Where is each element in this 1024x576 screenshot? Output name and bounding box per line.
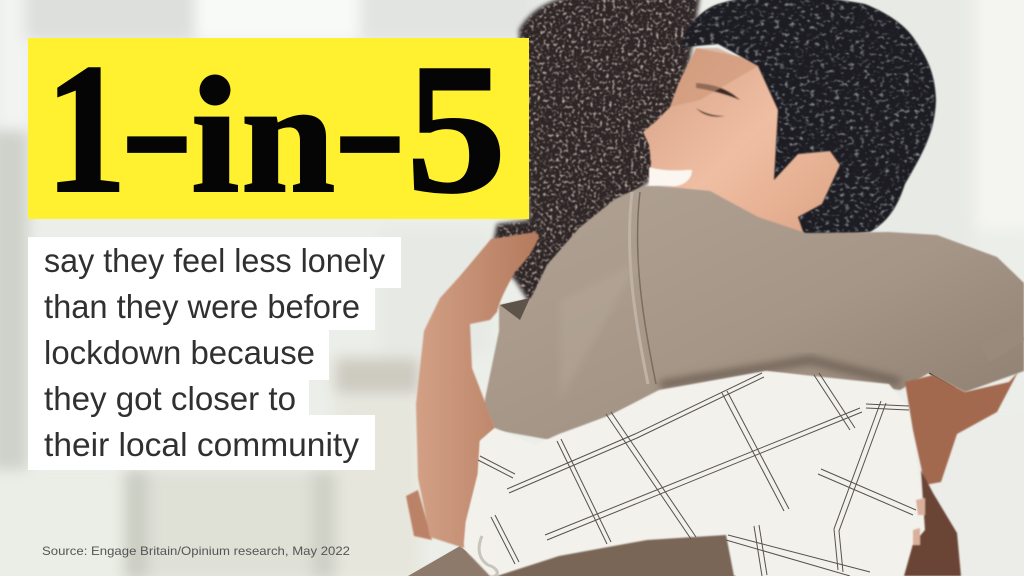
- statement text block with white highlight strips: their local community: [44, 426, 359, 463]
- statement text block with white highlight strips: than they were before: [44, 288, 360, 325]
- headline: 1-in-5: –: [128, 23, 186, 229]
- headline: 1-in-5: [45, 23, 506, 231]
- headline: 1-in-5: 1: [45, 25, 127, 231]
- photo: taupe shirt bottom and trousers: [408, 530, 736, 576]
- photo: woman's short dark hair: [681, 0, 936, 240]
- photo: curly dark hair of the back figure: [490, 0, 700, 312]
- photo: woman's face and neck: [643, 48, 842, 240]
- headline: 1-in-5: –: [341, 23, 399, 229]
- photo: forearm behind at right: [905, 372, 1018, 485]
- headline: 1-in-5: i: [191, 50, 239, 226]
- photo: embracing hand and forearm: [406, 232, 539, 548]
- statement text block with white highlight strips: they got closer to: [44, 380, 296, 417]
- yellow headline panel: [28, 23, 529, 231]
- photo: white checked shirt: [464, 371, 925, 576]
- statement text block with white highlight strips: [28, 237, 401, 470]
- source note: Source: Engage Britain/Opinium research, May 2022: [42, 544, 350, 558]
- headline: 1-in-5: 5: [406, 25, 506, 231]
- photo: darker hand on the back: [904, 470, 961, 576]
- photo: taupe shirt with arm across: [484, 186, 1024, 440]
- headline: 1-in-5: n: [241, 48, 335, 226]
- statement text block with white highlight strips: lockdown because: [44, 334, 315, 371]
- statement text block with white highlight strips: say they feel less lonely: [44, 242, 385, 279]
